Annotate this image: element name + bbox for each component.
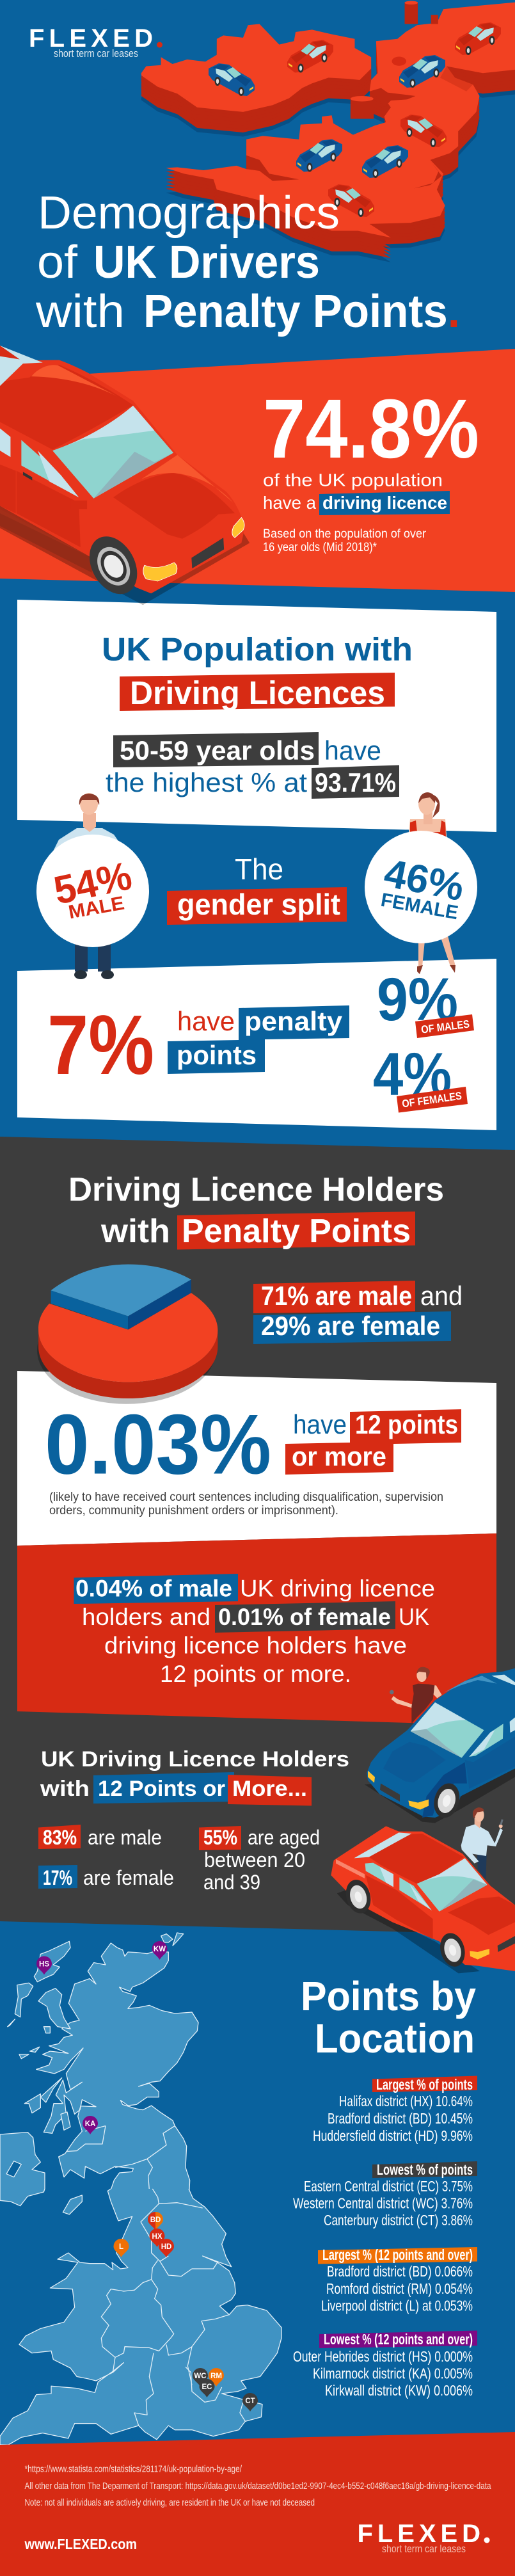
map pins: HS [39,1961,49,1969]
stat: 7% have penalty points: penalty [244,1006,343,1036]
stats: 83% male, 17% female, 55% aged 20-39: between 20 [204,1848,305,1871]
heading: driving licence holders with penalty points [68,1171,444,1250]
heading: UK population with driving licences: UK Population with [102,631,413,668]
figure: man holding 54% male: 54% [50,854,136,913]
text: 0.04% of male and 0.01% of female: 0.01% of female [218,1604,391,1630]
stat: 7% have penalty points: have [177,1006,235,1036]
stat: 0.03% have 12 points or more [45,1398,461,1492]
panel: driving licence stat band [0,349,515,592]
heading: driving licence holders with penalty points: Driving Licence Holders [68,1171,444,1208]
stats: 83% male, 17% female, 55% aged 20-39: are aged [248,1826,320,1849]
text: sources [24,2464,491,2508]
map: UK points by location [0,1933,281,2445]
title: Demographics [38,188,340,239]
stat: 9% of males: 9% [377,966,458,1034]
figure: woman holding 46% female: 46% [381,851,468,909]
stats: 83% male, 17% female, 55% aged 20-39: 83% [43,1826,77,1849]
stat: 71% male 29% female: 71% are male [261,1281,412,1311]
title: Penalty Points. [143,286,460,337]
heading: UK driving licence holders with 12 points or more: UK Driving Licence Holders [41,1747,349,1772]
stat: 7% have penalty points [47,998,349,1092]
list: largest % 12 points and over: Bradford district (BD) 0.066% [327,2263,473,2280]
illustration: blue car [365,1668,515,1823]
stat: 74.8% driving licence: have a [263,493,316,513]
list: largest % of points: Halifax district (HX) 10.64% [339,2093,473,2109]
title: of [37,237,78,288]
heading: driving licence holders with penalty points: Penalty Points [182,1213,411,1250]
stat: 4% of females: OF FEMALES [401,1090,463,1110]
panel: penalty points white [17,959,496,1130]
title: UK Drivers [93,237,320,288]
list: largest % 12 points and over [318,2246,477,2314]
chart: 3D pie 71% male 29% female [37,1264,218,1404]
text: 0.04% of male and 0.01% of female: 0.04% of male [75,1576,232,1601]
panel: UK population white [17,600,496,832]
stat: 71% male 29% female: and [420,1281,463,1311]
map pins: HD [161,2243,171,2251]
heading: the gender split: gender split [177,888,340,921]
map pins: CT [245,2397,255,2405]
stats: 83% male, 17% female, 55% aged 20-39: 17% [43,1866,72,1889]
heading: points by location: Location [315,2015,475,2061]
stat: 71% male 29% female [253,1281,463,1344]
list: lowest % 12 points and over: Kirkwall district (KW) 0.006% [325,2382,473,2399]
text: 0.04% of male and 0.01% of female: driving licence holders have [104,1632,407,1659]
panel: red 0.04% male 0.01% female [17,1533,496,1725]
heading: driving licence holders with penalty points: with [100,1213,170,1250]
map pins: KW [154,1946,166,1953]
logo: Flexed: FLEXED [29,24,153,52]
text: 0.04% of male and 0.01% of female: 12 points or more. [160,1661,351,1687]
text: court sentences note: orders, community punishment orders or imprisonment). [49,1504,338,1517]
map pins: EC [202,2383,212,2391]
callout: 50-59 year olds: 93.71% [315,767,396,797]
list: largest % 12 points and over: Liverpool district (L) at 0.053% [321,2298,473,2314]
stats: 83% male, 17% female, 55% aged 20-39: are male [88,1826,162,1849]
list: lowest % 12 points and over: Kilmarnock district (KA) 0.005% [313,2365,473,2382]
heading: UK population with driving licences [102,631,413,711]
logo: Flexed: short term car leases [54,47,138,60]
text: sources: *https://www.statista.com/statistics/281174/uk-population-by-age/ [24,2464,242,2474]
text: 0.04% of male and 0.01% of female: holders and [82,1604,210,1630]
stat: 71% male 29% female: 29% are female [261,1311,440,1341]
list: lowest % of points [293,2161,477,2228]
list: lowest % 12 points and over [293,2331,477,2399]
map pins: HX [152,2233,162,2241]
text: website: www.FLEXED.com [24,2536,137,2552]
map pins: WC [194,2372,207,2380]
stat: 74.8% driving licence: driving licence [322,493,447,513]
figure: woman holding 46% female: FEMALE [379,890,460,924]
callout: 50-59 year olds: 50-59 year olds [120,735,315,765]
title: with [35,286,125,337]
panel: 0.03% white [17,1371,496,1546]
figure: woman holding 46% female [365,792,477,974]
callout: 50-59 year olds: have [324,735,381,765]
stat: 74.8% driving licence: 16 year olds (Mid 2018)* [263,541,377,554]
stat: 74.8% driving licence [263,381,479,554]
stat: 9% of males: OF MALES [420,1018,470,1036]
heading: UK driving licence holders with 12 points or more: More... [232,1777,307,1801]
stat: 7% have penalty points: 7% [47,998,154,1092]
panel: footer [0,2432,515,2576]
map pins: KA [85,2120,95,2128]
callout: 50-59 year olds: the highest % at [106,767,307,797]
list: largest % of points [313,2076,477,2144]
heading: the gender split [167,852,347,925]
stat: 7% have penalty points: points [177,1040,257,1070]
figure: man with phone [461,1807,503,1880]
stats: 83% male, 17% female, 55% aged 20-39 [38,1825,320,1894]
map pins: BD [150,2216,161,2224]
stat: 74.8% driving licence: 74.8% [263,381,479,476]
logo: footer Flexed: FLEXED [357,2520,480,2548]
figure: man holding 54% male: MALE [67,893,126,923]
text: 0.04% of male and 0.01% of female [74,1574,435,1687]
stat: 0.03% have 12 points or more: or more [292,1441,386,1471]
list: largest % of points: Bradford district (BD) 10.45% [328,2110,473,2127]
stats: 83% male, 17% female, 55% aged 20-39: and 39 [203,1871,260,1894]
heading: UK driving licence holders with 12 points or more: with [40,1777,90,1801]
text: 0.04% of male and 0.01% of female: UK driving licence [240,1576,435,1601]
map pins: RM [210,2372,222,2380]
logo: footer Flexed: short term car leases [382,2543,466,2555]
stat: 0.03% have 12 points or more: 0.03% [45,1398,271,1492]
list: largest % of points: Largest % of points [376,2076,473,2093]
text: court sentences note [49,1491,443,1517]
stat: 74.8% driving licence: of the UK population [263,470,443,490]
text: 0.04% of male and 0.01% of female: UK [399,1604,429,1630]
list: lowest % of points: Lowest % of points [377,2161,473,2178]
map pins [36,1941,258,2412]
stats: 83% male, 17% female, 55% aged 20-39: are female [83,1866,174,1889]
heading: UK driving licence holders with 12 points or more: 12 Points or [98,1777,225,1801]
list: largest % 12 points and over: Romford district (RM) 0.054% [326,2280,473,2297]
illustration: large red car [0,346,250,605]
heading: the gender split: The [235,852,283,886]
isometric UK map with cars [141,1,515,262]
map pins: L [119,2243,123,2251]
stat: 0.03% have 12 points or more: 12 points [355,1409,458,1439]
illustration: red car [331,1826,515,1973]
text: sources: Note: not all individuals are actively driving, are resident in the UK or have not deceased [24,2498,315,2508]
stat: 0.03% have 12 points or more: have [293,1409,347,1439]
figure: woman with keys [390,1667,442,1724]
heading: UK population with driving licences: Driving Licences [130,675,385,711]
stat: 4% of females: 4% [373,1041,452,1108]
heading: UK driving licence holders with 12 points or more [40,1747,349,1806]
panel: dark section [0,1137,515,1935]
stat: 74.8% driving licence: Based on the population of over [263,527,427,541]
figure: man holding 54% male [36,793,149,979]
heading: points by location: Points by [301,1973,476,2019]
stats: 83% male, 17% female, 55% aged 20-39: 55% [203,1826,237,1849]
text: court sentences note: (likely to have received court sentences including disqualification, supervision [49,1491,443,1504]
callout: 50-59 year olds [106,732,399,799]
title [35,188,460,337]
heading: points by location [301,1973,476,2061]
